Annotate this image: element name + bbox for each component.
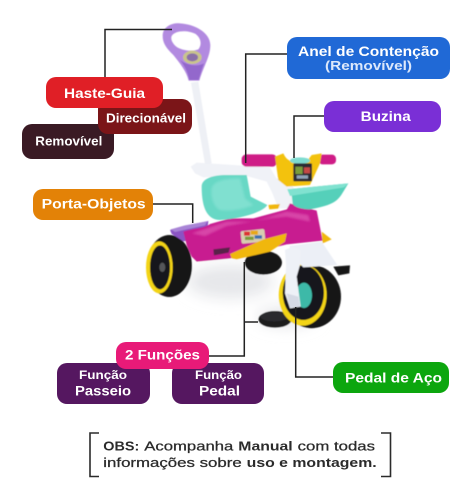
label: Buzina: [324, 101, 441, 132]
purple storage bin: [170, 221, 208, 241]
tricycle illustration: [146, 23, 350, 328]
label: Função Passeio: Passeio: [75, 384, 131, 399]
note: manual observation: OBS:: [103, 439, 139, 454]
floor shadow: [187, 265, 317, 327]
label: Buzina: Buzina: [361, 109, 411, 124]
white bar: [191, 163, 278, 205]
label: Haste-Guia: [46, 77, 163, 108]
label: 2 Funções: [116, 342, 209, 369]
body sticker: [240, 229, 266, 244]
note: manual observation: informações sobre: [103, 455, 242, 470]
label: Anel de Contenção: [287, 37, 450, 79]
label: Porta-Objetos: [33, 189, 153, 220]
label: Pedal de Aço: [333, 362, 449, 393]
pedal: [258, 311, 292, 328]
label: Função Passeio: [57, 363, 150, 404]
label: Removível: Removível: [35, 135, 102, 149]
note: manual observation: [90, 433, 390, 476]
label: Pedal de Aço: Pedal de Aço: [345, 371, 442, 386]
label: Direcionável: [98, 99, 192, 134]
label: Função Passeio: Função: [79, 368, 127, 382]
mudguard: [289, 242, 337, 267]
front wheel: [279, 264, 341, 328]
label: Anel de Contenção: (Removível): [325, 58, 412, 73]
note: manual observation: com todas: [298, 439, 376, 454]
note: manual observation: Manual: [238, 439, 293, 454]
footrest: [230, 232, 332, 259]
far rear wheel: [245, 251, 282, 275]
label: Função Pedal: Pedal: [199, 384, 240, 399]
label: Função Pedal: [172, 363, 264, 404]
label: Removível: [22, 124, 114, 159]
handle: [163, 23, 210, 81]
rear wheel: [146, 235, 192, 297]
note: manual observation: uso e montagem.: [247, 455, 377, 470]
white column: [267, 178, 293, 208]
footrest right black: [333, 265, 350, 275]
basket: [287, 183, 348, 209]
horn button: [268, 204, 280, 209]
seat: [202, 175, 267, 220]
label: Haste-Guia: Haste-Guia: [64, 86, 146, 101]
connector lines: [105, 30, 333, 377]
post: [191, 82, 212, 164]
handlebar grips: [242, 154, 336, 167]
body: [183, 203, 323, 262]
label: Porta-Objetos: Porta-Objetos: [42, 197, 146, 212]
note: manual observation: Acompanha: [144, 439, 234, 454]
front fork: [285, 247, 312, 308]
label: 2 Funções: 2 Funções: [125, 348, 200, 362]
handlebar centre: [275, 153, 322, 187]
label: Direcionável: Direcionável: [106, 112, 186, 126]
label: Anel de Contenção: Anel de Contenção: [298, 44, 439, 59]
label: Função Pedal: Função: [195, 368, 242, 382]
